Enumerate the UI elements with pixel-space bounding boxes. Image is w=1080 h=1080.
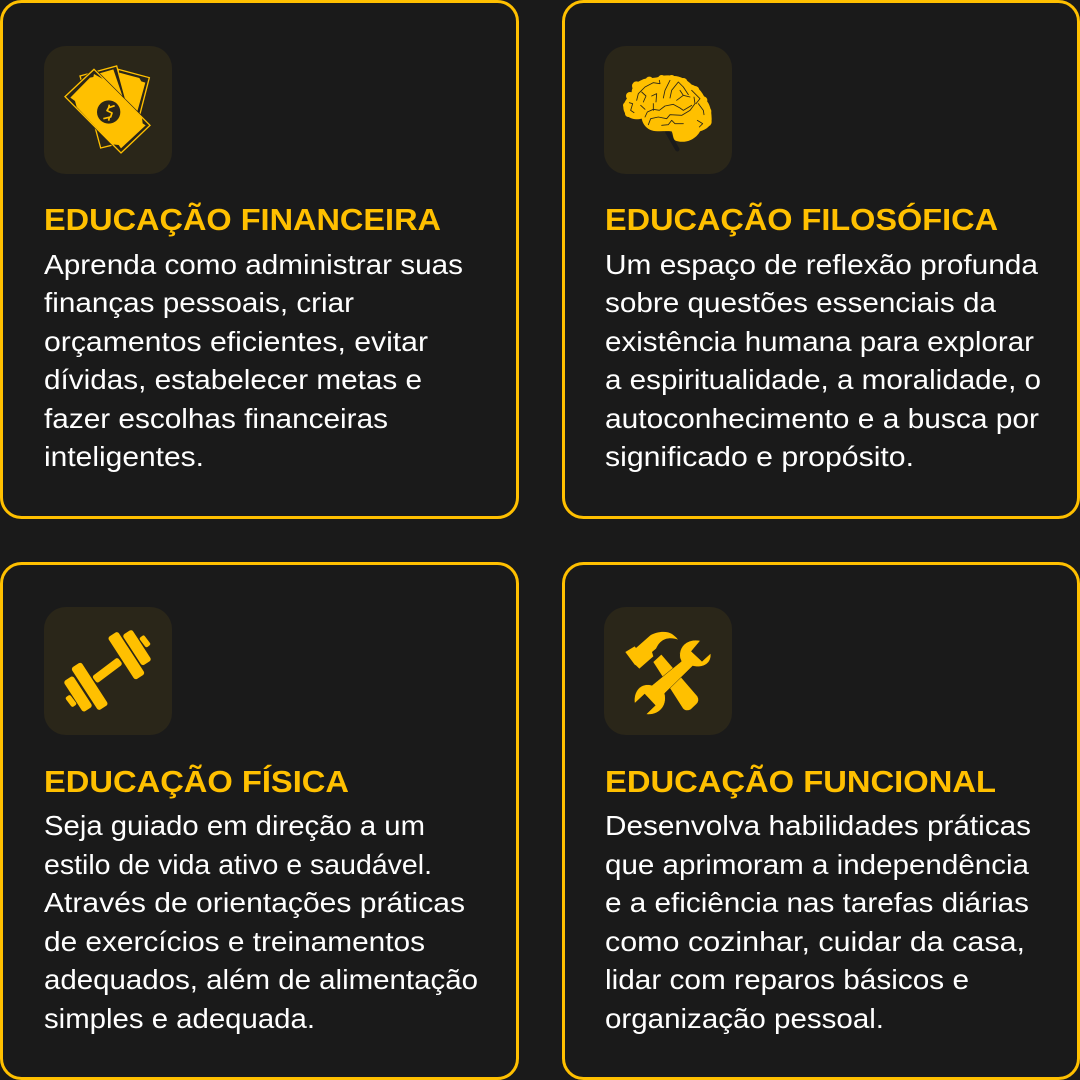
text block: financeira: fazer escolhas financeiras <box>44 403 388 434</box>
text block: funcional <box>605 810 1031 1034</box>
text block: física <box>44 810 478 1034</box>
text block: filosófica: autoconhecimento e a busca por <box>605 403 1039 434</box>
heading: educação filosófica: EDUCAÇÃO FILOSÓFICA <box>605 201 998 237</box>
icon: brain <box>604 46 732 174</box>
text block: física: adequados, além de alimentação <box>44 964 478 995</box>
text block: financeira: orçamentos eficientes, evitar <box>44 326 428 357</box>
icon: money bills <box>44 46 172 174</box>
text block: financeira <box>44 249 463 472</box>
heading: educação financeira: EDUCAÇÃO FINANCEIRA <box>44 202 441 237</box>
icon: dumbbell <box>44 607 172 735</box>
text block: filosófica: Um espaço de reflexão profunda <box>605 249 1038 280</box>
text block: funcional: organização pessoal. <box>605 1003 884 1034</box>
text block: funcional: como cozinhar, cuidar da casa, <box>605 926 1025 957</box>
icon: hammer and wrench <box>604 607 732 735</box>
text block: filosófica: sobre questões essenciais da <box>605 287 996 318</box>
text block: física: Através de orientações práticas <box>44 887 465 918</box>
panel: educação filosófica <box>564 2 1078 518</box>
text block: funcional: e a eficiência nas tarefas diárias <box>605 887 1029 918</box>
text block: física: Seja guiado em direção a um <box>44 810 425 841</box>
heading: educação funcional: EDUCAÇÃO FUNCIONAL <box>605 764 996 799</box>
text block: filosófica: existência humana para explorar <box>605 326 1034 357</box>
text block: filosófica <box>605 249 1041 472</box>
text block: funcional: lidar com reparos básicos e <box>605 964 969 995</box>
text block: filosófica: a espiritualidade, a moralidade, o <box>605 364 1041 395</box>
panel: educação funcional <box>564 564 1078 1078</box>
text block: financeira: inteligentes. <box>44 441 204 472</box>
text block: física: estilo de vida ativo e saudável. <box>44 849 432 880</box>
text block: financeira: finanças pessoais, criar <box>44 287 354 318</box>
text block: funcional: que aprimoram a independência <box>605 849 1029 880</box>
text block: filosófica: significado e propósito. <box>605 441 914 472</box>
text block: funcional: Desenvolva habilidades práticas <box>605 810 1031 841</box>
panel: educação financeira <box>2 2 518 518</box>
panel: educação física <box>2 564 518 1078</box>
heading: educação física: EDUCAÇÃO FÍSICA <box>44 764 349 799</box>
text block: física: simples e adequada. <box>44 1003 315 1034</box>
text block: financeira: Aprenda como administrar suas <box>44 249 463 280</box>
text block: física: de exercícios e treinamentos <box>44 926 425 957</box>
text block: financeira: dívidas, estabelecer metas e <box>44 364 422 395</box>
